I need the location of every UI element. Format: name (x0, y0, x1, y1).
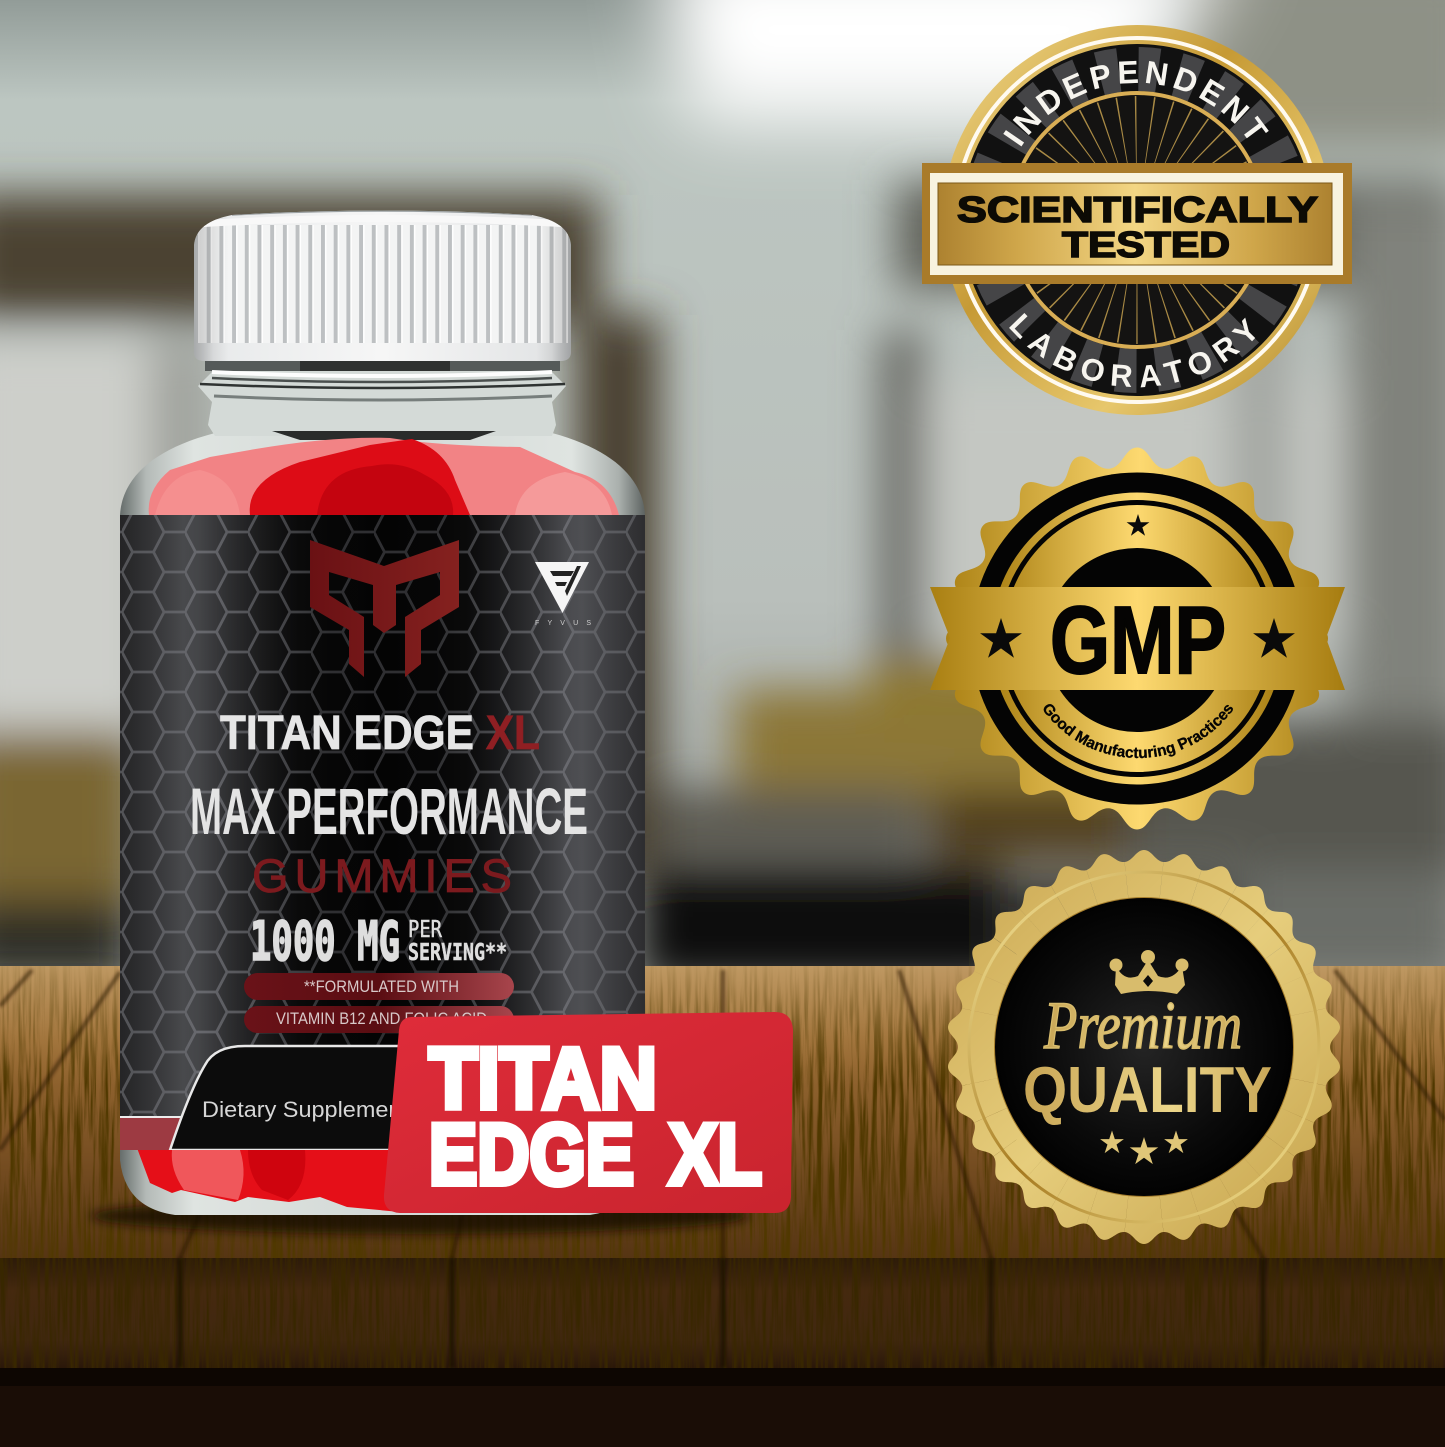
table top (0, 966, 1445, 1261)
product bottle (90, 205, 750, 1234)
sunburst centre (1008, 91, 1266, 349)
three stars (1100, 1130, 1188, 1164)
bottle label (120, 515, 660, 1150)
gummies subtitle: GUMMIES (252, 849, 512, 902)
red gummies bottom (137, 1148, 400, 1212)
arc text: Good Manufacturing Practices (1044, 704, 1233, 758)
ribbon stars (980, 618, 1295, 658)
bottle cap (190, 205, 575, 365)
label footer panel (120, 1044, 398, 1150)
bottle shadow (90, 1198, 750, 1234)
pill: vitamin b12: VITAMIN B12 AND FOLIC ACID (276, 1009, 487, 1028)
badge: scientifically tested (922, 25, 1352, 415)
glass body (120, 433, 645, 1215)
red sticker: titan edge xl: TITAN (429, 1031, 657, 1127)
pill: formulated with: **FORMULATED WITH (304, 977, 459, 996)
label footer panel: Dietary Supplement (202, 1097, 408, 1122)
red sticker: titan edge xl (384, 1012, 793, 1213)
fyvus logo (535, 562, 591, 627)
scalloped gold edge (940, 440, 1340, 840)
red gummies top (149, 438, 619, 515)
gmp wordmark: GMP (1050, 587, 1226, 694)
headline: MAX PERFORMANCE (190, 774, 588, 848)
quality wordmark: QUALITY (1023, 1053, 1272, 1126)
ribbon: SCIENTIFICALLY (957, 189, 1318, 230)
glass neck (198, 358, 566, 440)
arc text laboratory: LABORATORY (1009, 313, 1256, 388)
crown icon (1110, 950, 1188, 994)
brand logo: red mask (310, 540, 459, 677)
table front edge (0, 1258, 1445, 1368)
ribbon: TESTED (1062, 224, 1230, 265)
ribbon (922, 163, 1352, 284)
red sticker: titan edge xl: EDGE (429, 1107, 634, 1203)
red sticker: titan edge xl: XL (669, 1107, 762, 1203)
wooden table (0, 966, 1445, 1447)
badge: gmp (930, 448, 1345, 830)
fyvus logo: FYVUS (535, 620, 591, 627)
badge: premium quality (940, 845, 1350, 1250)
dosage: PER (408, 917, 442, 943)
table shadow base (0, 1368, 1445, 1447)
star top (1127, 514, 1149, 536)
product name: TITAN EDGE XL (220, 707, 540, 760)
premium script: Premium (1043, 987, 1242, 1063)
ribbon (930, 587, 1345, 690)
blurred room background (0, 0, 1445, 1000)
dosage: 1000 MG (250, 910, 400, 973)
arc text independent: INDEPENDENT (1003, 60, 1269, 146)
dosage: SERVING** (408, 940, 507, 966)
pill: vitamin b12 (244, 1006, 514, 1033)
pill: formulated with (244, 973, 514, 1000)
